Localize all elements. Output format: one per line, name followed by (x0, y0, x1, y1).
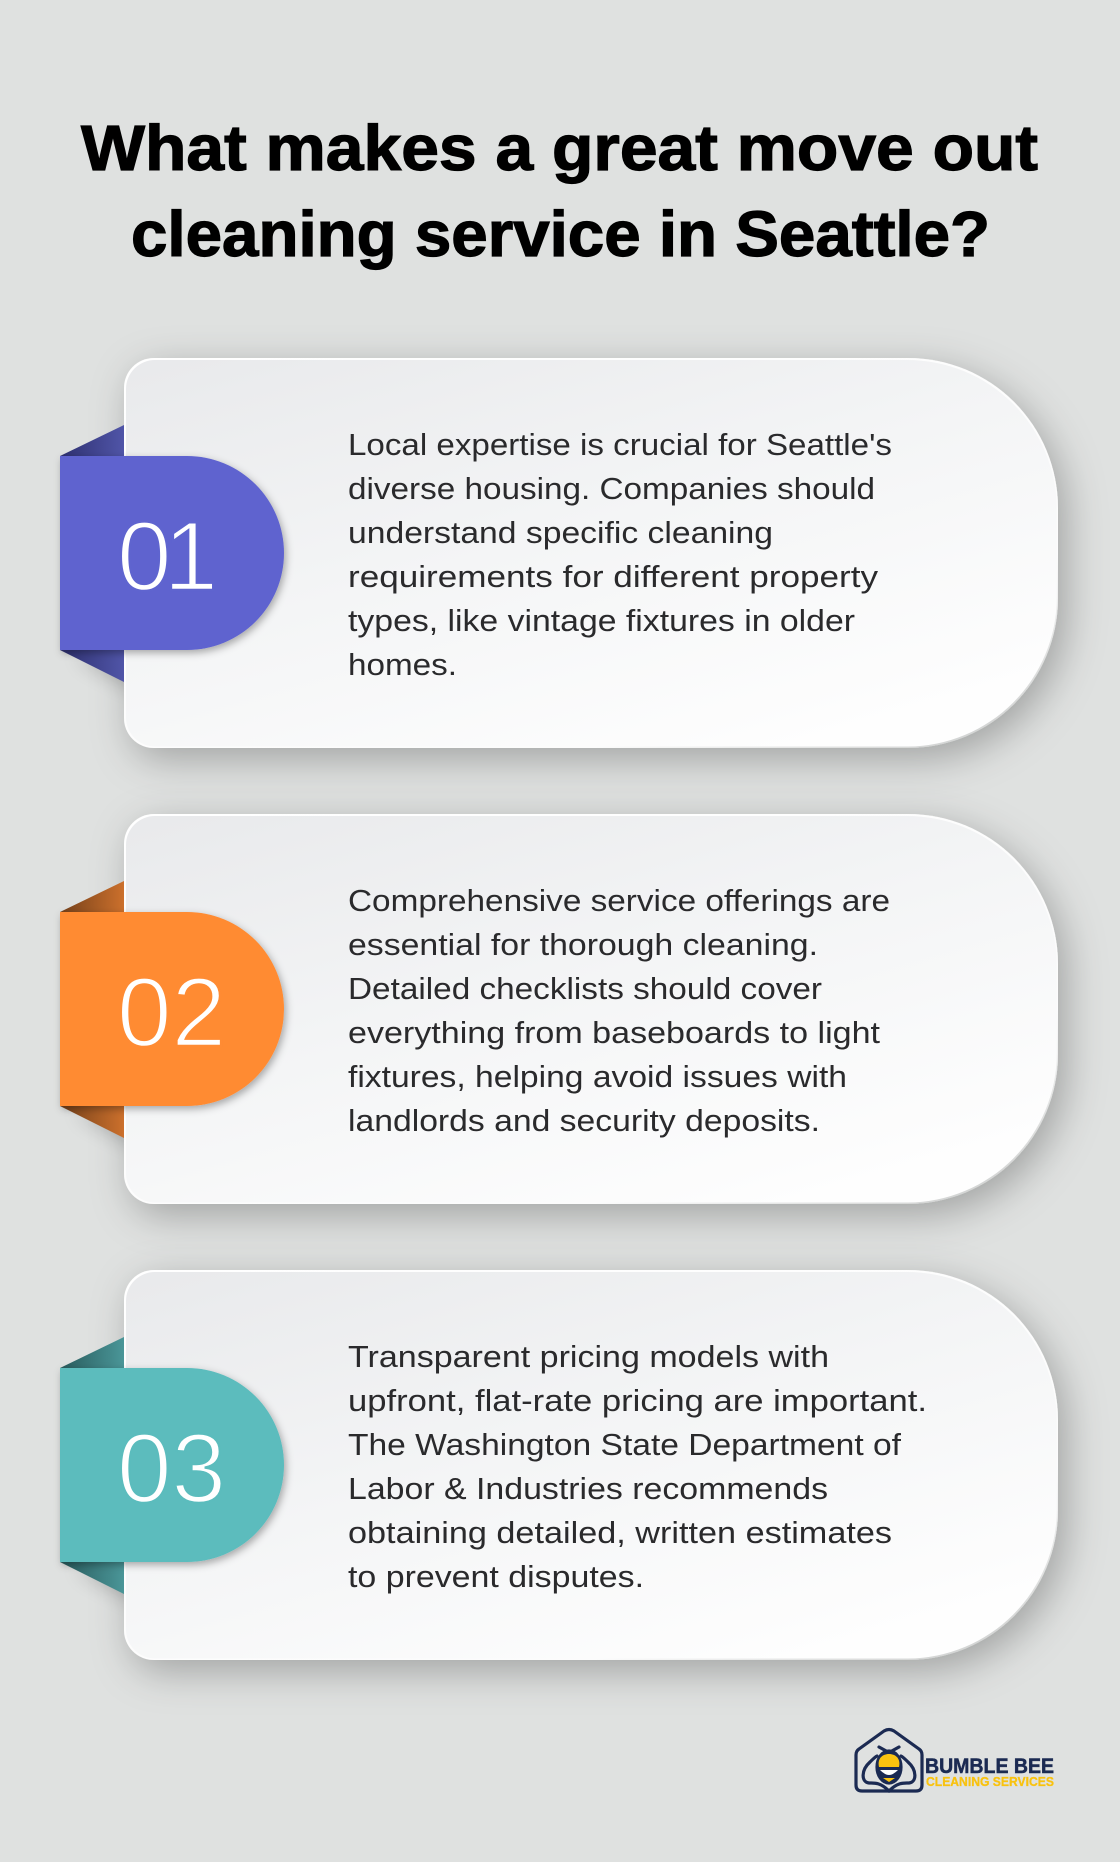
description 02: fixtures, helping avoid issues with (348, 1059, 847, 1094)
ribbon fold top 02 (60, 881, 124, 912)
description 01: homes. (348, 647, 457, 682)
ribbon fold top 03 (60, 1337, 124, 1368)
description 01: Local expertise is crucial for Seattle's (348, 427, 892, 462)
logo wordmark: BUMBLE BEE (925, 1755, 1054, 1778)
panel: step 01 (60, 358, 1058, 748)
description 02: everything from baseboards to light (348, 1015, 880, 1050)
panel: step 03 (60, 1270, 1058, 1660)
number 01: 01 (117, 501, 218, 611)
number 02: 02 (117, 957, 226, 1067)
description 02 (348, 883, 890, 1138)
ribbon fold bottom 02 (60, 1106, 124, 1138)
description 01: types, like vintage fixtures in older (348, 603, 855, 638)
description 03: upfront, flat-rate pricing are important. (348, 1383, 927, 1418)
number 03: 03 (117, 1413, 226, 1523)
description 01 (348, 427, 892, 682)
logo tagline: CLEANING SERVICES (926, 1775, 1054, 1789)
title: What makes a great move out (81, 112, 1038, 184)
number tab 02 (60, 912, 284, 1106)
ribbon shadow 03 (76, 1562, 140, 1602)
panel: step 02 (60, 814, 1058, 1204)
description 02: Detailed checklists should cover (348, 971, 822, 1006)
ribbon fold top 01 (60, 425, 124, 456)
description 03 (348, 1339, 927, 1594)
description 03: The Washington State Department of (348, 1427, 901, 1462)
description 03: Transparent pricing models with (348, 1339, 829, 1374)
title (81, 112, 1038, 270)
description 01: understand specific cleaning (348, 515, 773, 550)
description 03: Labor & Industries recommends (348, 1471, 828, 1506)
card 02 (124, 814, 1058, 1204)
ribbon shadow 01 (76, 650, 140, 690)
description 01: requirements for different property (348, 559, 879, 594)
title: cleaning service in Seattle? (131, 198, 990, 270)
number tab 03 (60, 1368, 284, 1562)
ribbon fold bottom 03 (60, 1562, 124, 1594)
logo: Bumble Bee Cleaning Services (856, 1730, 1054, 1791)
card 03 (124, 1270, 1058, 1660)
number tab 01 (60, 456, 284, 650)
description 02: landlords and security deposits. (348, 1103, 820, 1138)
ribbon shadow 02 (76, 1106, 140, 1146)
description 02: Comprehensive service offerings are (348, 883, 890, 918)
icon: house with bee (856, 1730, 922, 1791)
description 02: essential for thorough cleaning. (348, 927, 818, 962)
description 01: diverse housing. Companies should (348, 471, 875, 506)
description 03: to prevent disputes. (348, 1559, 644, 1594)
card 01 (124, 358, 1058, 748)
ribbon fold bottom 01 (60, 650, 124, 682)
description 03: obtaining detailed, written estimates (348, 1515, 892, 1550)
